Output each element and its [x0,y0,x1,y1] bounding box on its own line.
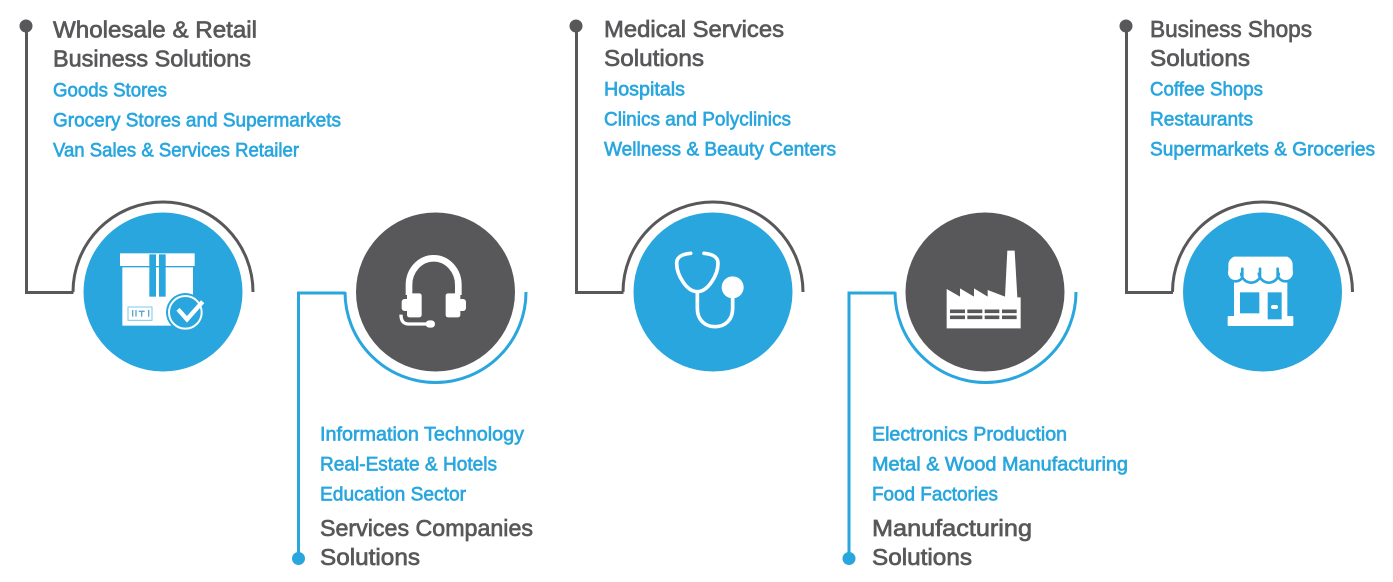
list [604,78,836,160]
heading [872,515,1032,570]
list: Electronics Production [872,424,1067,446]
heading: Solutions [604,45,704,71]
list: Hospitals [604,78,685,100]
panel: services companies [292,212,533,570]
list: Food Factories [872,484,998,506]
connector line [570,20,803,292]
icon: parcel box [120,253,205,332]
list [1150,78,1375,160]
list: Coffee Shops [1150,78,1263,100]
heading: Manufacturing [872,515,1032,541]
panel: business shops [1120,16,1375,372]
circle [1183,212,1342,372]
list: Wellness & Beauty Centers [604,138,836,160]
list [53,80,341,162]
circle [906,212,1064,372]
list [320,424,524,506]
heading: Medical Services [604,16,784,42]
heading: Business Solutions [53,46,251,72]
heading [1150,16,1312,71]
icon: storefront [1227,257,1294,326]
connector line [1120,20,1352,292]
heading: Solutions [1150,45,1250,71]
connector line [842,292,1076,565]
heading: Wholesale & Retail [53,16,257,42]
list: Supermarkets & Groceries [1150,138,1375,160]
panel: medical services [570,16,836,372]
heading: Solutions [320,544,420,570]
heading: Business Shops [1150,16,1312,42]
heading: Services Companies [320,515,533,541]
panel: manufacturing [842,212,1128,570]
heading [604,16,784,71]
list: Grocery Stores and Supermarkets [53,110,341,132]
list: Metal & Wood Manufacturing [872,454,1128,476]
list: Education Sector [320,484,466,506]
connector line [292,292,526,565]
circle [634,212,792,372]
heading: Solutions [872,544,972,570]
list: Information Technology [320,424,524,446]
list: Goods Stores [53,80,167,102]
list [872,424,1128,506]
icon: factory [947,251,1021,328]
list: Clinics and Polyclinics [604,108,791,130]
icon: headset [401,258,466,328]
heading [320,515,533,570]
icon: stethoscope [677,253,744,327]
circle [356,212,515,372]
circle [84,212,242,372]
heading [53,16,257,72]
connector line [20,20,253,292]
list: Restaurants [1150,108,1253,130]
panel: wholesale and retail [20,16,341,372]
list: Real-Estate & Hotels [320,454,497,476]
list: Van Sales & Services Retailer [53,140,299,162]
